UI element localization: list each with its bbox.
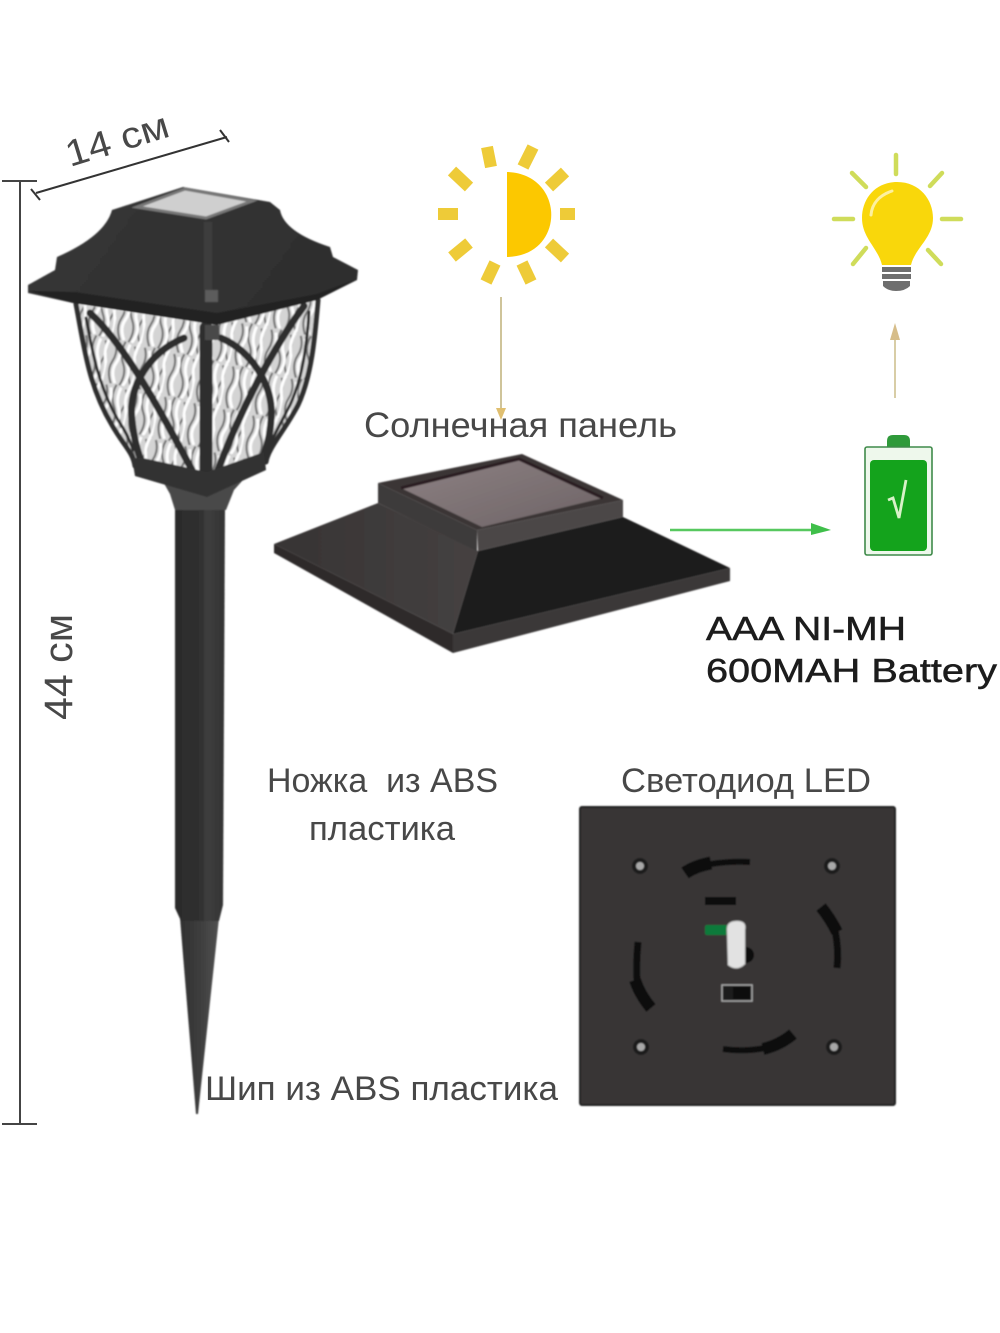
LED — [727, 921, 745, 968]
switch — [722, 985, 752, 1001]
bulb rays — [834, 155, 961, 264]
base right slope — [453, 517, 730, 634]
lamp solar panel top — [137, 189, 252, 218]
battery specification: AAA NI-MH — [706, 610, 906, 647]
label: leg material: пластика — [309, 810, 455, 848]
bulb glass — [862, 182, 933, 265]
solar garden lamp — [28, 187, 358, 1114]
label: leg material — [267, 762, 498, 848]
icon: sun — [438, 147, 575, 282]
bulb screw base — [882, 267, 911, 291]
mounting slots — [635, 862, 838, 1050]
lamp collar — [161, 470, 252, 510]
arrow: panel to battery — [670, 523, 831, 535]
lamp glass frame — [76, 300, 318, 480]
half sun disc — [507, 172, 543, 257]
icon: battery — [865, 435, 932, 555]
width dimension line — [31, 130, 229, 200]
underside plate — [580, 807, 895, 1105]
lamp roof — [28, 187, 358, 325]
battery outline — [865, 447, 932, 555]
lamp glass body — [76, 300, 318, 490]
raised frame — [378, 483, 477, 551]
battery specification: 600MAH Battery — [706, 652, 998, 689]
roof front edges and band — [28, 279, 357, 325]
solar glass — [401, 459, 603, 527]
green LED contact — [705, 925, 729, 935]
mounting screws — [634, 860, 840, 1053]
bulb highlight — [871, 191, 892, 215]
label: height 44 cm: 44 см — [37, 614, 81, 720]
base left slope — [274, 503, 478, 634]
lamp spike — [180, 918, 219, 1114]
label: LED: Светодиод LED — [621, 762, 871, 800]
check mark — [888, 480, 906, 518]
battery charge — [870, 460, 927, 551]
battery cap — [887, 435, 910, 447]
lamp pole — [175, 505, 225, 921]
solar panel module — [274, 454, 730, 653]
battery specification — [706, 610, 998, 689]
icon: light bulb — [834, 155, 961, 291]
panel underside with LED — [580, 807, 895, 1105]
sun rays — [438, 147, 575, 282]
label: spike material: Шип из ABS пластика — [205, 1070, 558, 1108]
arrow: sun to solar panel — [496, 297, 506, 420]
LED shadow — [738, 947, 754, 963]
label: width 14 cm: 14 см — [60, 104, 174, 175]
heading: solar panel: Солнечная панель — [364, 406, 677, 445]
base rim — [274, 544, 453, 653]
height dimension line — [2, 181, 37, 1124]
arrow: battery to bulb — [890, 323, 900, 398]
lamp lower ring — [132, 452, 266, 497]
label: leg material: Ножка из ABS — [267, 762, 498, 800]
